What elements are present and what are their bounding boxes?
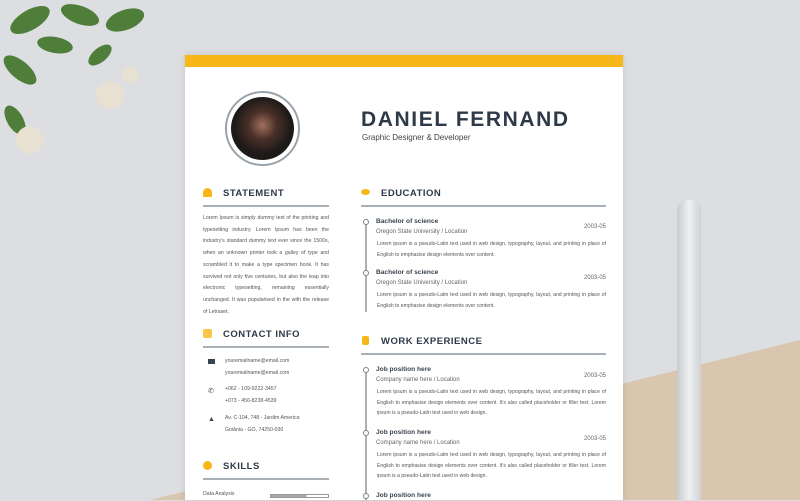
statement section: Lorem Ipsum is simply dummy text of the printing and typesetting industry. Lorem Ipsum has been the industry's standard dummy text ever since the 1500s, when an unknown printer took a galley of type and scrambled it to make a type specimen book. It has survived not only five centuries, but also the leap into electronic typesetting, remaining essentially unchanged. It was popularised in the with the release of Letraset. (203, 215, 329, 315)
work experience section: WORK EXPERIENCE (381, 336, 482, 347)
education section: Bachelor of science (376, 269, 438, 276)
work experience section: Company name here / Location (376, 440, 460, 446)
work experience section: 2003-05 (584, 373, 606, 379)
work experience section: Lorem ipsum is a pseudo-Latin text used in web design, typography, layout, and printing in place of English to emphasise design elements over content. It's also called placeholder or filler text. Lorem ipsum is a pseudo-Latin text used in web design. (377, 389, 606, 416)
work experience section: Job position here (376, 492, 431, 499)
subtitle: Graphic Designer & Developer (362, 133, 470, 142)
education section: Lorem ipsum is a pseudo-Latin text used in web design, typography, layout, and printing in place of English to emphasise design elements over content. (377, 292, 606, 308)
skills section: SKILLS (223, 461, 260, 472)
education section: Lorem ipsum is a pseudo-Latin text used in web design, typography, layout, and printing in place of English to emphasise design elements over content. (377, 241, 606, 258)
education section: EDUCATION (381, 188, 441, 199)
education section: Oregon State University / Location (376, 280, 467, 286)
plant decoration (4, 4, 144, 154)
contact info section: Av. C-104, 748 - Jardim America (225, 415, 299, 421)
contact info section: CONTACT INFO (223, 329, 300, 340)
education section: Oregon State University / Location (376, 229, 467, 235)
contact info section (203, 329, 329, 433)
contact info section: Goiânia - GO, 74250-030 (225, 427, 283, 433)
work experience section (361, 336, 606, 500)
top bar (185, 55, 623, 67)
contact info section: youremailname@email.com (225, 358, 289, 364)
education section (361, 188, 606, 312)
glass tube (677, 200, 701, 500)
contact info section: ✆ (208, 388, 214, 395)
work experience section: 2003-05 (584, 436, 606, 442)
contact info section: ▲ (208, 416, 215, 423)
work experience section: Job position here (376, 366, 431, 373)
statement section: STATEMENT (223, 188, 284, 199)
contact info section: youremailname@email.com (225, 370, 289, 376)
contact info section: +062 - 109-9222-3457 (225, 386, 276, 392)
work experience section: Job position here (376, 429, 431, 436)
work experience section: Company name here / Location (376, 377, 460, 383)
resume page (185, 55, 623, 500)
contact info section: +073 - 456-8238-4539 (225, 398, 276, 404)
skills section: Data Analysis (203, 491, 234, 497)
education section: Bachelor of science (376, 218, 438, 225)
education section: 2003-05 (584, 224, 606, 230)
work experience section: Lorem ipsum is a pseudo-Latin text used in web design, typography, layout, and printing in place of English to emphasise design elements over content. It's also called placeholder or filler text. Lorem ipsum is a pseudo-Latin text used in web design. (377, 452, 606, 479)
photo (225, 91, 300, 166)
education section: 2003-05 (584, 275, 606, 281)
skills section (203, 461, 329, 498)
name: DANIEL FERNAND (361, 108, 570, 131)
